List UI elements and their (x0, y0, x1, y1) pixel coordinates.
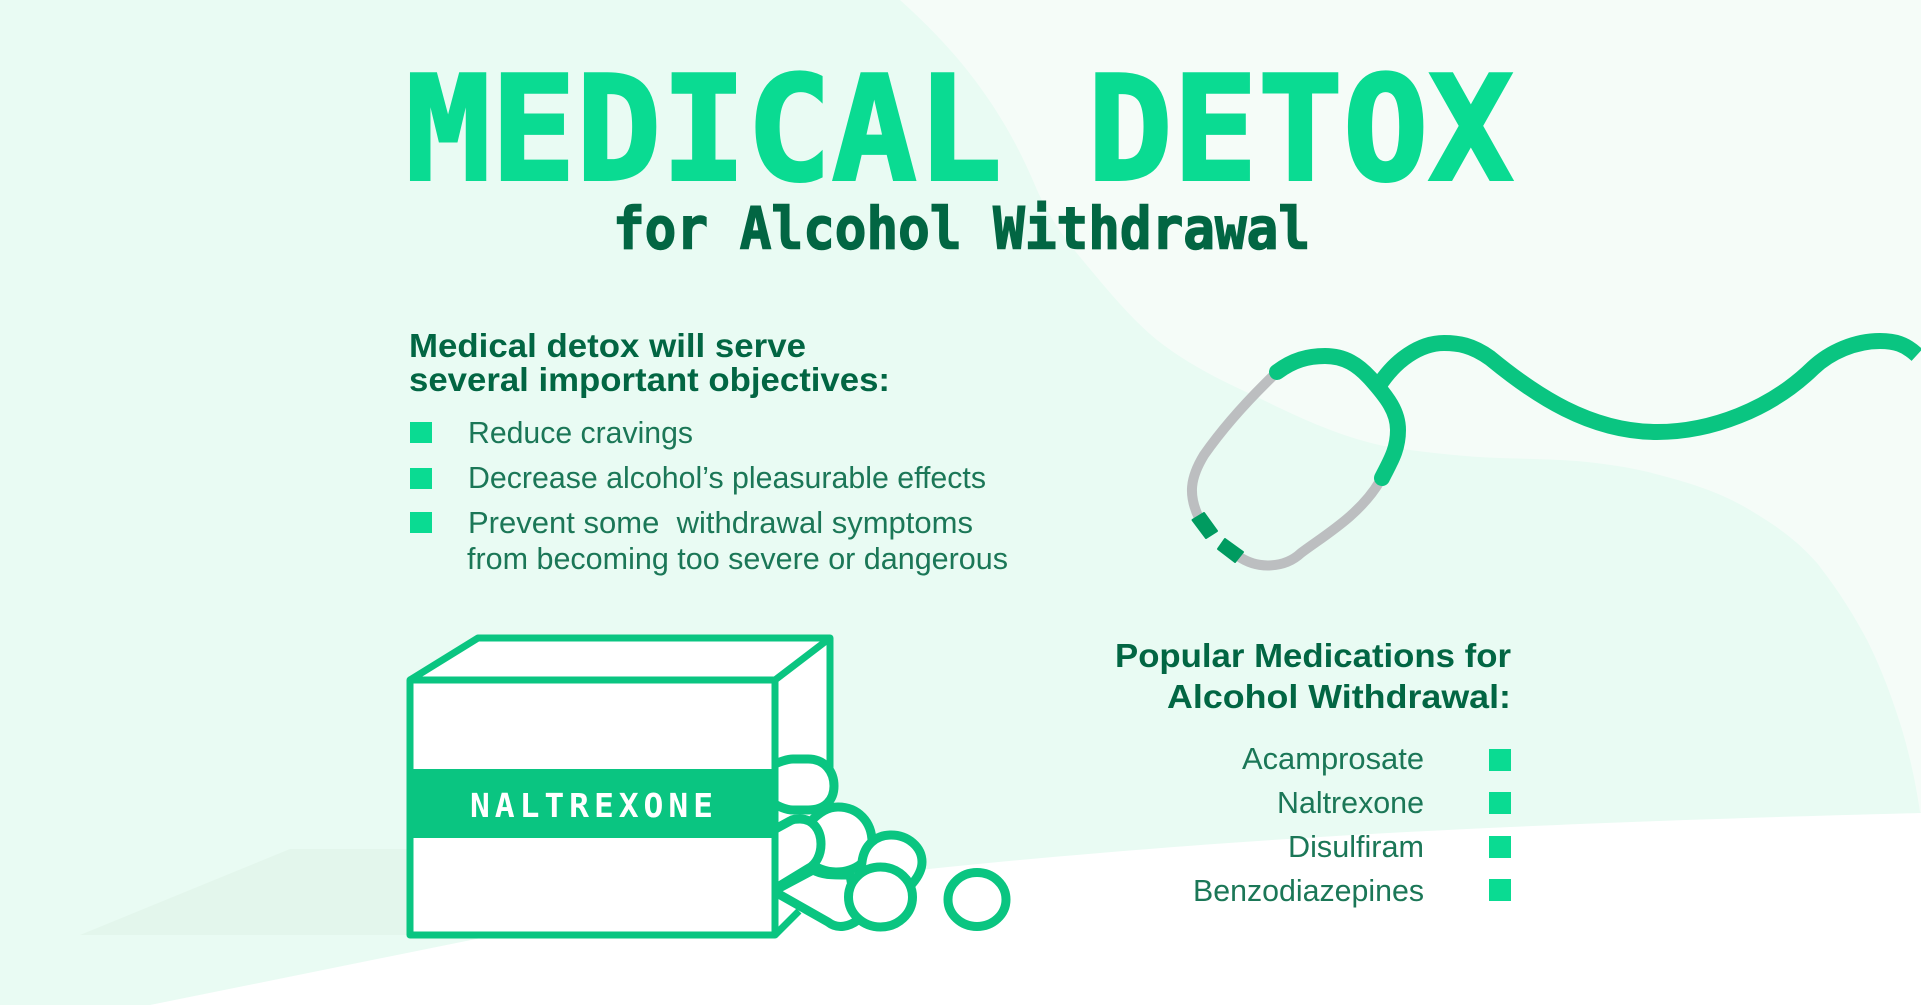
medication: naltrexone (1277, 785, 1511, 820)
label band (409, 769, 776, 838)
label text: NALTREXONE (470, 786, 713, 825)
pills spilling from box (768, 759, 1006, 927)
objectives heading: several important objectives: (409, 361, 890, 398)
medication: disulfiram (1288, 829, 1511, 864)
box front (410, 680, 775, 935)
objectives heading (409, 327, 890, 398)
medications heading: Popular Medications for (1115, 637, 1511, 674)
stethoscope tips (1192, 513, 1243, 562)
objective: decrease pleasurable effects: Decrease alcohol’s pleasurable effects (468, 460, 986, 495)
medication: disulfiram: Disulfiram (1288, 829, 1424, 864)
medication: benzodiazepines: Benzodiazepines (1193, 873, 1424, 908)
title: MEDICAL DETOX (406, 46, 1514, 214)
objective: reduce cravings: Reduce cravings (468, 415, 693, 450)
icon: stethoscope (1192, 341, 1917, 565)
panel: objectives (409, 327, 1008, 576)
objective: prevent symptoms (410, 505, 1008, 576)
icon: medicine box with pills (409, 638, 1006, 935)
panel: popular medications (1115, 637, 1511, 908)
medications heading (1115, 637, 1511, 715)
medications heading: Alcohol Withdrawal: (1167, 678, 1511, 715)
medication: naltrexone: Naltrexone (1277, 785, 1424, 820)
subtitle: for Alcohol Withdrawal (613, 194, 1310, 262)
objectives heading: Medical detox will serve (409, 327, 806, 364)
box side and top (410, 638, 830, 935)
objective: prevent symptoms: from becoming too severe or dangerous (467, 541, 1008, 576)
medication: acamprosate (1242, 741, 1511, 776)
objective: prevent symptoms: Prevent some withdrawal symptoms (468, 505, 973, 540)
medication: acamprosate: Acamprosate (1242, 741, 1424, 776)
